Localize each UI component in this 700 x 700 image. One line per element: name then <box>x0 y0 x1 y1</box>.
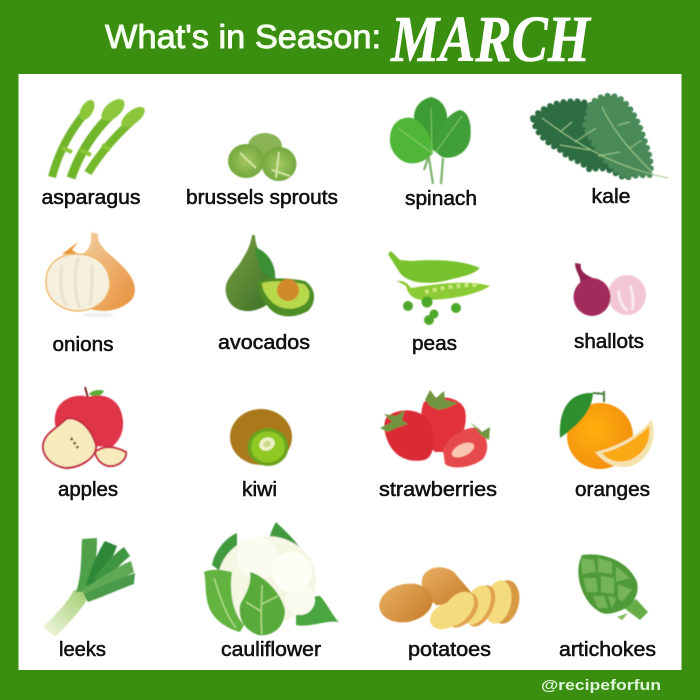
item: artichokes <box>559 554 656 661</box>
icon: oranges <box>560 391 654 469</box>
label: cauliflower: cauliflower <box>221 639 321 661</box>
title <box>105 3 592 76</box>
item: brussels sprouts <box>186 133 338 209</box>
label: spinach: spinach <box>405 188 477 210</box>
label: avocados: avocados <box>218 332 310 354</box>
icon: strawberries <box>380 390 490 467</box>
item: shallots <box>574 263 646 353</box>
icon: cauliflower <box>204 522 339 635</box>
icon: artichokes <box>578 554 648 620</box>
label: peas: peas <box>412 333 457 355</box>
label: strawberries: strawberries <box>379 479 497 501</box>
icon: spinach <box>390 97 471 184</box>
label: artichokes: artichokes <box>559 639 656 661</box>
icon: potatoes <box>376 567 523 635</box>
icon: brussels sprouts <box>228 133 296 181</box>
item: kiwi <box>230 409 292 501</box>
icon: kale <box>533 96 668 178</box>
icon: avocados <box>226 235 314 316</box>
item: oranges <box>560 391 654 501</box>
icon: leeks <box>43 538 135 637</box>
item: leeks <box>43 538 135 661</box>
item: onions <box>46 232 135 356</box>
label: shallots: shallots <box>574 331 644 353</box>
credit: handle: @recipeforfun <box>541 677 661 694</box>
label: brussels sprouts: brussels sprouts <box>186 187 338 209</box>
item: asparagus <box>42 95 148 209</box>
icon: onions <box>46 232 135 318</box>
label: onions: onions <box>52 334 114 356</box>
item: kale <box>533 96 668 208</box>
icon: asparagus <box>52 95 148 178</box>
item: avocados <box>218 235 314 354</box>
icon: apples <box>43 387 126 468</box>
icon: shallots <box>574 263 646 316</box>
item: apples <box>43 387 126 501</box>
item: spinach <box>390 97 477 210</box>
item: strawberries <box>379 390 497 501</box>
icon: peas <box>388 251 490 325</box>
label: leeks: leeks <box>59 639 106 661</box>
label: kiwi: kiwi <box>242 479 277 501</box>
title: What's in Season: <box>105 18 381 55</box>
item: potatoes <box>376 567 523 661</box>
item: peas <box>388 251 490 355</box>
label: asparagus: asparagus <box>42 187 140 209</box>
item: cauliflower <box>204 522 339 661</box>
icon: kiwi <box>230 409 292 466</box>
label: apples: apples <box>58 479 118 501</box>
label: potatoes: potatoes <box>408 639 491 661</box>
label: oranges: oranges <box>575 479 650 501</box>
title: MARCH <box>390 3 592 76</box>
label: kale: kale <box>592 186 630 208</box>
